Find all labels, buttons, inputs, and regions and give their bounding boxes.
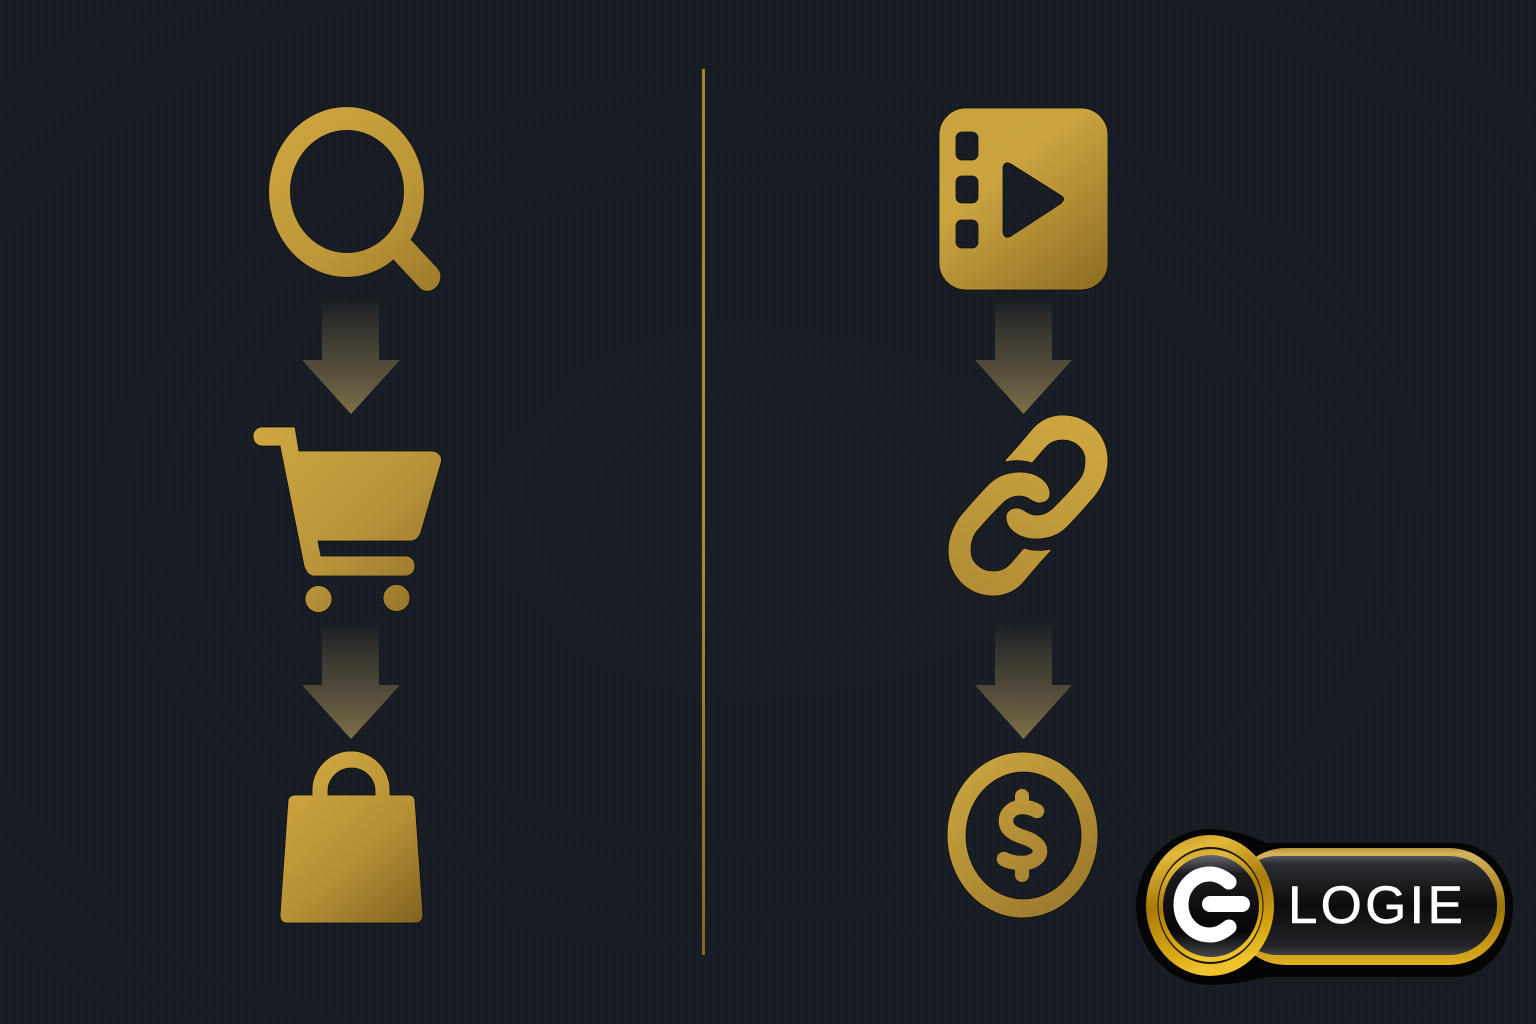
icon: magnifying glass (269, 107, 440, 291)
logo pill (1230, 848, 1505, 965)
left flow: shopping journey (253, 107, 441, 923)
logo ring (1146, 835, 1274, 976)
icon: video player (939, 108, 1108, 290)
logo badge (1136, 829, 1513, 985)
logo black backing (1136, 829, 1513, 985)
icon: shopping bag (280, 751, 423, 923)
logo wordmark: LOGIE (1288, 876, 1466, 935)
icon: shopping cart (253, 427, 441, 612)
logo G mark (1181, 874, 1242, 935)
divider line (702, 69, 705, 955)
arrow: video to link (975, 298, 1072, 414)
icon: chain link (948, 415, 1108, 596)
icon: dollar coin (947, 752, 1098, 918)
arrow: link to coin (975, 623, 1072, 739)
arrow: cart to bag (302, 623, 400, 739)
right flow: affiliate journey (939, 108, 1108, 918)
arrow: search to cart (302, 298, 400, 414)
